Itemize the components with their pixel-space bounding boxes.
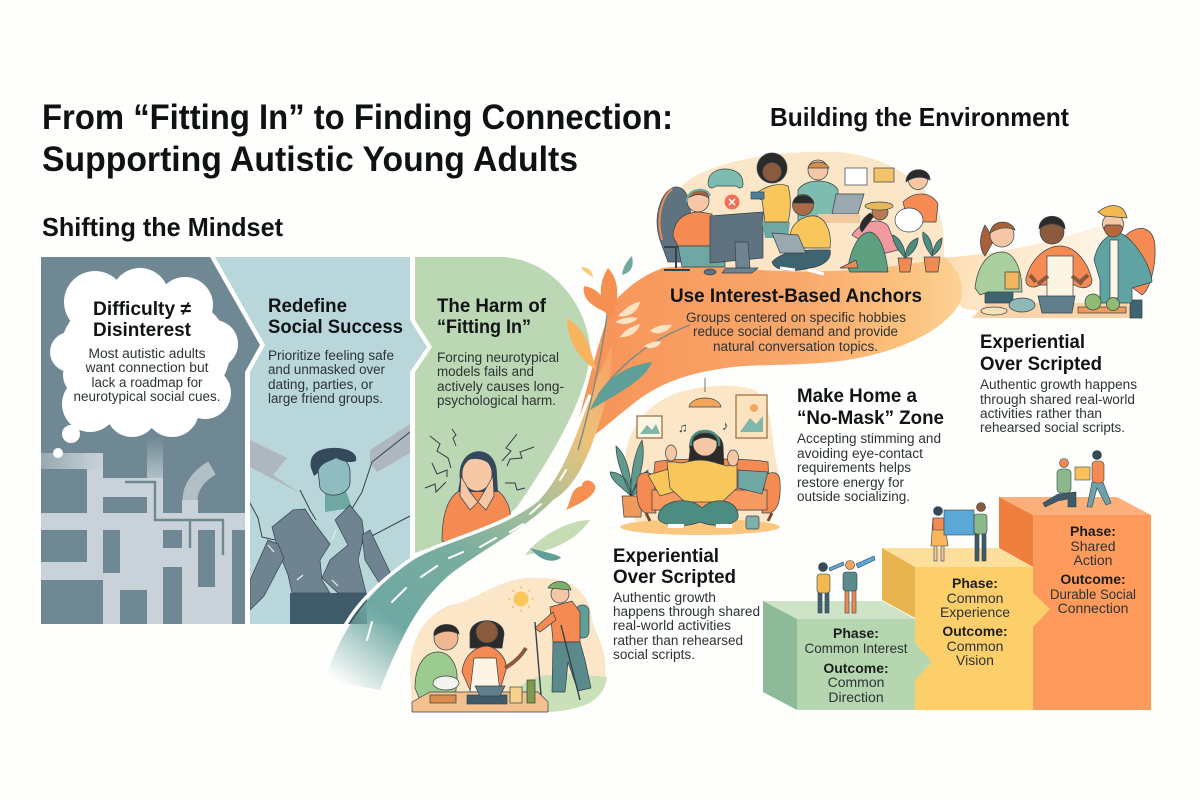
text: experiential over scripted (right): Authentic growth happens bbox=[980, 377, 1137, 392]
text: experiential over scripted (lower): Experiential bbox=[613, 545, 719, 567]
body text bbox=[268, 348, 394, 406]
text: make home a no-mask zone: outside socializing. bbox=[797, 489, 910, 504]
icon: leafy branch bbox=[525, 256, 690, 561]
body text: actively causes long- bbox=[437, 379, 564, 394]
text: use interest-based anchors: Groups centered on specific hobbies bbox=[686, 310, 906, 325]
text: make home a no-mask zone: requirements helps bbox=[797, 460, 911, 475]
laptop on table bbox=[818, 194, 864, 223]
framed pictures bbox=[637, 395, 767, 438]
hiker bbox=[535, 582, 591, 700]
step 2: common experience: Common bbox=[947, 590, 1003, 606]
step 3: shared action: Connection bbox=[1058, 600, 1128, 616]
potted plants bbox=[893, 232, 942, 272]
illustration: man with cracked mask bbox=[250, 424, 410, 624]
text: experiential over scripted (lower): rather than rehearsed bbox=[613, 633, 743, 648]
text: make home a no-mask zone: avoiding eye-contact bbox=[797, 446, 923, 461]
heading: Social Success bbox=[268, 316, 403, 338]
step 2: common experience: Experience bbox=[940, 604, 1010, 620]
man with apron bbox=[1026, 216, 1092, 303]
step 1: common interest: Direction bbox=[828, 689, 884, 705]
text: experiential over scripted (right): through shared real-world bbox=[980, 392, 1135, 407]
woman with apron bbox=[462, 621, 526, 692]
text: experiential over scripted (lower): Over Scripted bbox=[613, 566, 736, 588]
body text: models fails and bbox=[437, 364, 534, 379]
mug bbox=[746, 516, 759, 529]
body text: Forcing neurotypical bbox=[437, 350, 559, 365]
swoosh: orange pathway bbox=[570, 257, 962, 450]
step 2: common experience: Outcome: bbox=[942, 623, 1008, 639]
road bbox=[325, 345, 612, 690]
heading: shifting the mindset: Shifting the Mindset bbox=[42, 212, 283, 242]
red cross badge bbox=[724, 194, 740, 210]
cloud body text bbox=[74, 346, 220, 404]
cloud body text: neurotypical social cues. bbox=[74, 389, 220, 404]
sun bbox=[508, 586, 534, 612]
figures: carrying a box together bbox=[1043, 450, 1111, 507]
text: experiential over scripted (right): Over Scripted bbox=[980, 353, 1102, 375]
panel: redefine social success bbox=[215, 257, 427, 624]
figures: looking through telescopes bbox=[817, 556, 875, 613]
table bbox=[972, 303, 1142, 318]
woman in green sweater bbox=[975, 222, 1022, 303]
cloud body text: Most autistic adults bbox=[88, 346, 206, 361]
game controller bbox=[708, 169, 743, 188]
text: experiential over scripted (lower): happens through shared bbox=[613, 604, 760, 619]
panel: the harm of fitting in bbox=[415, 257, 590, 553]
illustration: no-mask home bbox=[610, 378, 780, 535]
text: experiential over scripted (lower): real-world activities bbox=[613, 618, 731, 633]
body text: and unmasked over bbox=[268, 362, 386, 377]
potted plant bbox=[610, 440, 648, 517]
man in green bbox=[415, 624, 459, 700]
step 2: common experience: Phase: bbox=[952, 575, 998, 591]
body text: dating, parties, or bbox=[268, 377, 374, 392]
text: experiential over scripted (right): Experiential bbox=[980, 331, 1085, 353]
step 3: shared action: Shared bbox=[1070, 538, 1116, 554]
body text bbox=[437, 350, 564, 408]
step 3: shared action: Durable Social bbox=[1050, 586, 1136, 602]
cloud heading: Disinterest bbox=[93, 319, 191, 341]
maze illustration bbox=[41, 437, 245, 624]
body text: Prioritize feeling safe bbox=[268, 348, 394, 363]
step 2: common experience: Vision bbox=[956, 652, 994, 668]
text: experiential over scripted (lower) bbox=[613, 545, 760, 662]
stepped chart: phases to durable connection bbox=[763, 497, 1151, 710]
music note: ♪ bbox=[722, 418, 728, 433]
step 1: common interest: Common bbox=[828, 674, 884, 690]
hiker with backpack bbox=[1094, 206, 1155, 318]
text: use interest-based anchors: reduce social demand and provide bbox=[693, 324, 898, 339]
band: pale ribbon behind cooking trio bbox=[935, 222, 1125, 319]
illustration: distressed woman bbox=[425, 429, 534, 548]
woman with headphones bbox=[658, 431, 738, 526]
cloud body text: want connection but bbox=[84, 360, 209, 375]
thought cloud bbox=[50, 268, 238, 458]
text: use interest-based anchors: Use Interest-Based Anchors bbox=[670, 285, 922, 307]
person holding phone bbox=[751, 153, 790, 238]
person sitting with laptop bbox=[772, 194, 830, 274]
text: experiential over scripted (lower): Authentic growth bbox=[613, 590, 716, 605]
body text: large friend groups. bbox=[268, 391, 383, 406]
body text: psychological harm. bbox=[437, 393, 556, 408]
heading bbox=[268, 295, 403, 338]
text: use interest-based anchors: natural conversation topics. bbox=[713, 339, 878, 354]
step 1: common interest: Common Interest bbox=[804, 640, 908, 656]
step 3: shared action: Phase: bbox=[1070, 523, 1116, 539]
title bbox=[42, 98, 673, 179]
text: make home a no-mask zone: Make Home a bbox=[797, 385, 917, 407]
heading: The Harm of bbox=[437, 295, 546, 317]
hanging lamp bbox=[689, 378, 721, 407]
woman with palette bbox=[895, 170, 938, 232]
cloud heading bbox=[93, 298, 191, 341]
cloud body text: lack a roadmap for bbox=[92, 375, 203, 390]
heading: Redefine bbox=[268, 295, 347, 317]
pot and food bbox=[981, 294, 1126, 315]
step 3: shared action: Action bbox=[1074, 552, 1112, 568]
step 3: shared action: Outcome: bbox=[1060, 571, 1126, 587]
panel: difficulty is not disinterest bbox=[41, 257, 260, 624]
text: use interest-based anchors bbox=[670, 285, 922, 354]
gaming chair bbox=[657, 187, 692, 270]
step 1: common interest bbox=[763, 601, 932, 710]
computer monitor bbox=[704, 212, 763, 275]
floor rug bbox=[620, 519, 780, 535]
text: experiential over scripted (lower): social scripts. bbox=[613, 647, 695, 662]
sofa bbox=[637, 459, 780, 521]
table with cooking gear bbox=[412, 680, 548, 712]
infographic canvas bbox=[41, 104, 1156, 712]
step 1: common interest: Outcome: bbox=[823, 660, 889, 676]
illustration: cooking and hiking bbox=[410, 578, 607, 712]
heading: building the environment: Building the Environment bbox=[770, 102, 1069, 132]
figures: sharing a blueprint bbox=[931, 502, 987, 561]
person in teal hoodie bbox=[798, 160, 838, 222]
music notes: ♫ bbox=[678, 420, 688, 435]
text: experiential over scripted (right): activities rather than bbox=[980, 406, 1102, 421]
gardener bbox=[840, 202, 898, 272]
illustration background blob: interest groups bbox=[678, 152, 944, 275]
text: make home a no-mask zone bbox=[797, 385, 944, 504]
text: make home a no-mask zone: Accepting stimming and bbox=[797, 431, 941, 446]
step 2: common experience bbox=[882, 548, 1050, 710]
heading bbox=[437, 295, 546, 338]
step 2: common experience: Common bbox=[947, 638, 1003, 654]
illustration: cooking trio bbox=[972, 206, 1155, 318]
step 3: shared action bbox=[999, 497, 1151, 710]
text: experiential over scripted (right) bbox=[980, 331, 1137, 435]
title: From “Fitting In” to Finding Connection: bbox=[42, 98, 673, 137]
step 1: common interest: Phase: bbox=[833, 625, 879, 641]
man in orange shirt bbox=[673, 190, 725, 267]
chat card and picture bbox=[845, 168, 894, 185]
cloud heading: Difficulty ≠ bbox=[93, 298, 191, 320]
title: Supporting Autistic Young Adults bbox=[42, 140, 578, 179]
heading: “Fitting In” bbox=[437, 316, 531, 338]
text: make home a no-mask zone: “No-Mask” Zone bbox=[797, 407, 944, 429]
illustration: interest-based groups bbox=[657, 153, 942, 275]
text: experiential over scripted (right): rehearsed social scripts. bbox=[980, 420, 1125, 435]
text: make home a no-mask zone: restore energy for bbox=[797, 475, 905, 490]
